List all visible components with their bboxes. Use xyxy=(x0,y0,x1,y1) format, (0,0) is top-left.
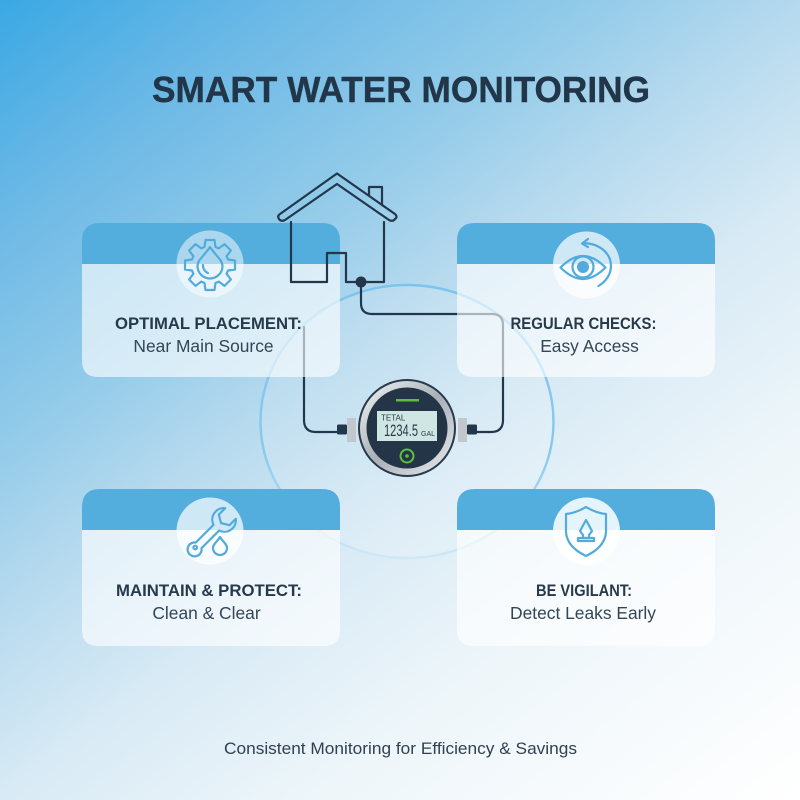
panel: maintain and protect xyxy=(82,489,340,646)
panel: optimal placement xyxy=(82,223,340,377)
heading: BE VIGILANT: xyxy=(536,581,632,600)
icon: gear with water drop xyxy=(176,230,244,298)
right connector xyxy=(458,418,477,442)
meter body xyxy=(358,379,456,477)
heading: OPTIMAL PLACEMENT: xyxy=(115,314,302,333)
meter xyxy=(337,379,477,477)
ring around meter xyxy=(260,285,554,558)
text: Clean & Clear xyxy=(152,603,261,623)
pipes behind cards xyxy=(304,282,503,432)
icon: wrench and water drop xyxy=(176,498,244,564)
pipe junction xyxy=(356,276,366,288)
panel: regular checks xyxy=(457,223,715,377)
icon: eye with return arrow xyxy=(553,232,620,298)
green indicator xyxy=(396,399,419,402)
display: TETAL xyxy=(381,414,406,422)
display: 1234.5 xyxy=(384,421,418,440)
footer text: Consistent Monitoring for Efficiency & Savings xyxy=(224,739,577,758)
display: GAL xyxy=(421,431,435,438)
text: Detect Leaks Early xyxy=(510,603,656,623)
text: Near Main Source xyxy=(133,336,274,356)
icon: house xyxy=(278,174,396,282)
icon: shield with flame xyxy=(553,498,620,564)
text: Easy Access xyxy=(540,336,639,356)
left connector xyxy=(337,418,356,442)
heading: MAINTAIN & PROTECT: xyxy=(116,581,302,600)
heading: REGULAR CHECKS: xyxy=(510,314,656,333)
title: SMART WATER MONITORING xyxy=(152,69,650,110)
display xyxy=(377,411,437,441)
panel: be vigilant xyxy=(457,489,715,646)
green button xyxy=(400,450,414,462)
